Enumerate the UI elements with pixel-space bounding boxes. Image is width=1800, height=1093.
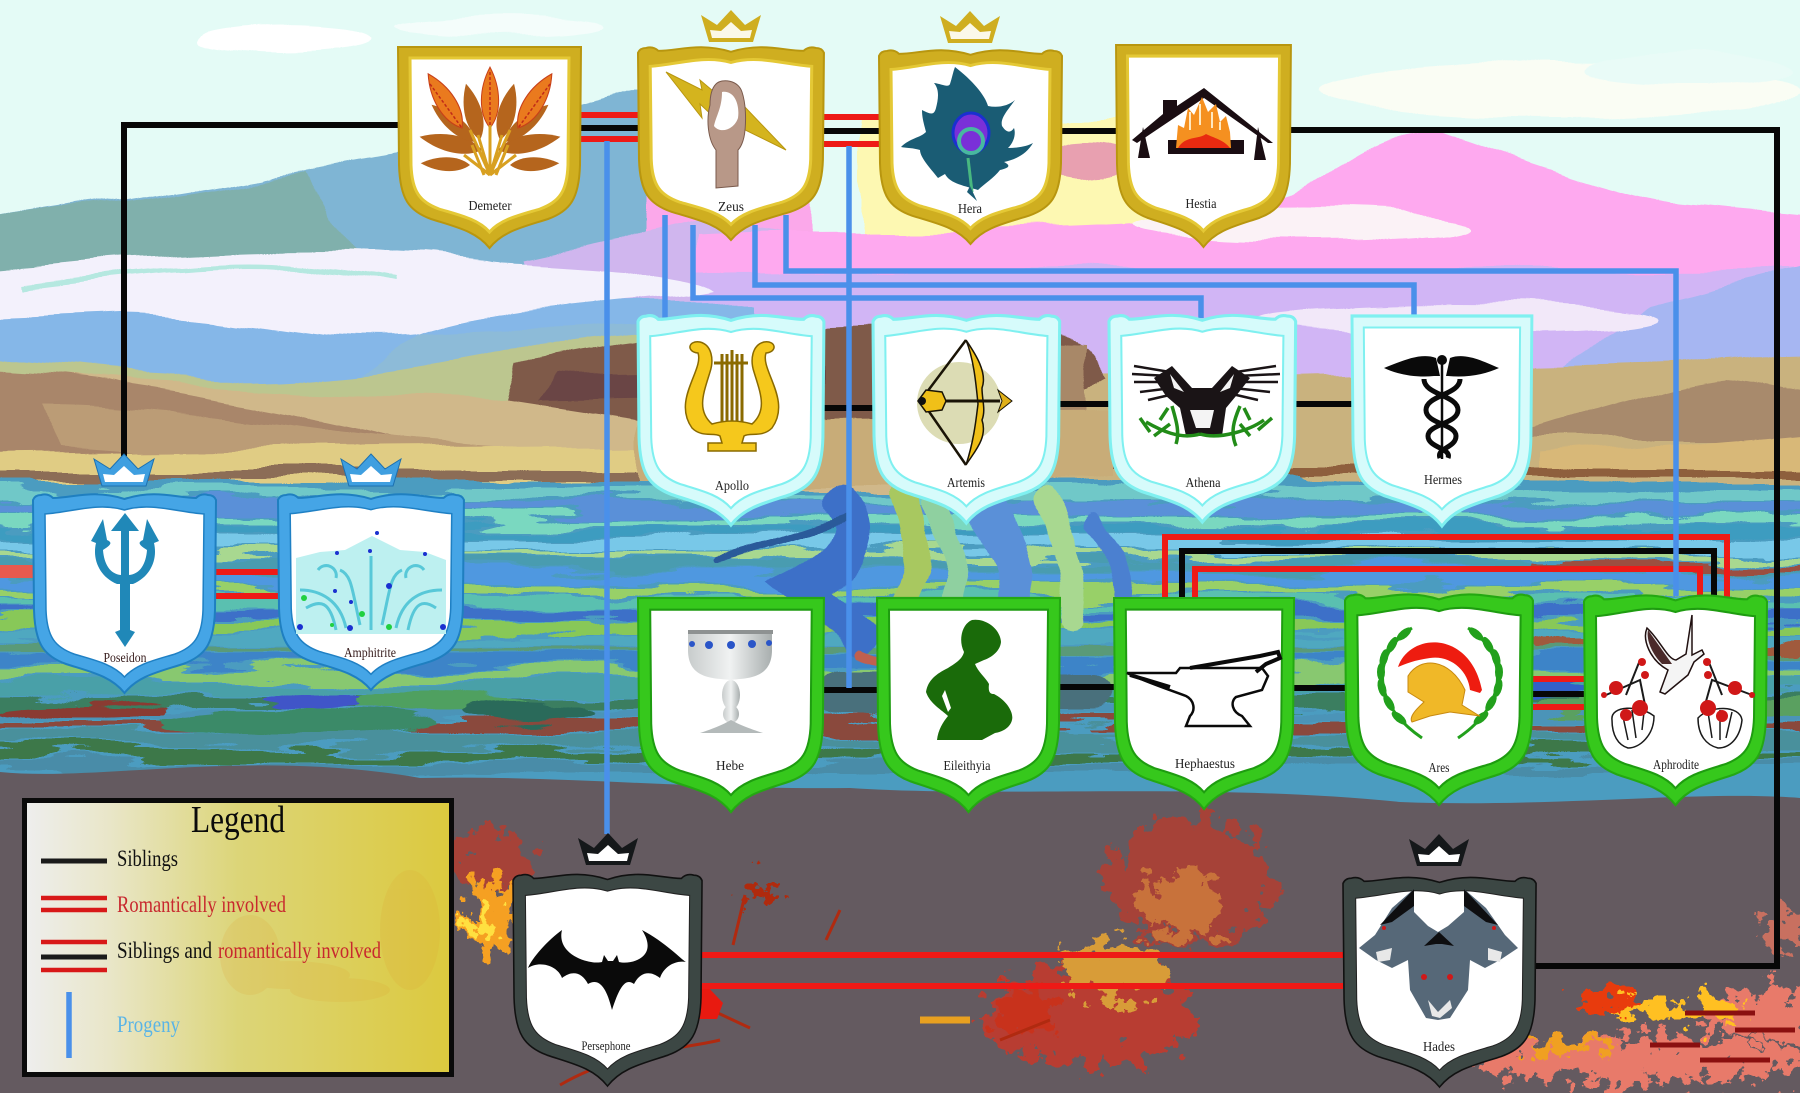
name: Hades: Hades — [1423, 1040, 1455, 1055]
name: Hebe: Hebe — [716, 759, 744, 774]
sky colours behind top row — [860, 120, 1160, 250]
shield: Demeter — [398, 47, 581, 248]
icon: peacock feather — [901, 67, 1033, 201]
shield: Aphrodite — [1584, 595, 1767, 805]
crown — [701, 10, 761, 42]
shield: Hermes — [1352, 316, 1532, 526]
shield: Amphitrite — [278, 454, 464, 690]
shield: Hestia — [1116, 45, 1291, 247]
pink mountain — [700, 132, 1800, 345]
shield: Poseidon — [33, 454, 216, 693]
legend: romantically involved — [41, 892, 286, 917]
shield: Ares — [1345, 594, 1533, 805]
name: Persephone: Persephone — [582, 1038, 631, 1053]
central sea swirl — [720, 495, 1126, 690]
shield: Artemis — [873, 315, 1060, 523]
icon: silver chalice — [688, 630, 773, 733]
icon: hearth house — [1132, 88, 1273, 160]
crown — [94, 454, 154, 486]
legend: progeny: Progeny — [117, 1012, 180, 1037]
name: Hestia: Hestia — [1186, 197, 1217, 212]
shield: Hephaestus — [1114, 598, 1294, 809]
icon: caduceus — [1384, 355, 1499, 459]
legend: siblings and romantically involved: Siblings and — [117, 938, 212, 963]
shield: Hades — [1343, 834, 1536, 1087]
icon: trident — [91, 513, 159, 647]
connector lines: romantically involved (red) — [216, 115, 1727, 986]
icon: golden lyre — [685, 342, 779, 451]
legend: siblings and romantically involved — [41, 938, 381, 970]
icon: dove, roses and shells — [1601, 615, 1755, 748]
connector lines: progeny (blue) — [607, 141, 1676, 834]
land bands — [0, 328, 820, 500]
shield: Athena — [1109, 315, 1296, 522]
name: Zeus: Zeus — [718, 200, 744, 215]
left mountain — [0, 88, 780, 300]
legend: siblings — [41, 846, 178, 871]
icon: owl and olive branch — [1132, 366, 1280, 446]
crown — [578, 833, 638, 865]
name: Ares: Ares — [1428, 761, 1450, 776]
name: Apollo: Apollo — [715, 479, 749, 494]
shield: Hebe — [638, 598, 824, 812]
shield: Apollo — [638, 315, 824, 525]
icon: ocean waves — [296, 531, 446, 634]
name: Hermes: Hermes — [1424, 473, 1462, 488]
name: Eileithyia: Eileithyia — [944, 759, 991, 774]
name: Hephaestus: Hephaestus — [1175, 757, 1235, 772]
icon: wheat sheaf — [418, 67, 562, 175]
left cloud and blue field — [0, 300, 760, 420]
shield: Hera — [879, 11, 1062, 244]
legend: progeny — [69, 992, 180, 1058]
icon: helmet and laurel — [1376, 625, 1504, 738]
legend: siblings and romantically involved: romantically involved — [218, 938, 381, 963]
icon: moon, bow and arrow — [917, 340, 1012, 465]
name: Aphrodite: Aphrodite — [1653, 758, 1699, 773]
icon: anvil and hammer — [1127, 652, 1280, 726]
icon: fist with lightning bolt — [666, 72, 786, 188]
legend: romantically involved: Romantically involved — [117, 892, 286, 917]
icon: pregnant silhouette — [926, 620, 1012, 740]
left edge red strip — [0, 565, 33, 578]
icon: bat — [528, 930, 686, 1010]
name: Hera: Hera — [958, 202, 983, 217]
shield: Zeus — [638, 10, 824, 240]
central brown mesa — [510, 325, 1110, 440]
legend title: Legend — [191, 799, 285, 841]
name: Poseidon: Poseidon — [104, 651, 146, 666]
name: Athena: Athena — [1186, 476, 1221, 491]
sea — [0, 482, 1800, 832]
crown — [1409, 834, 1469, 866]
legend panel — [24, 799, 452, 1074]
lava ground — [0, 765, 1800, 1093]
shield: Persephone — [513, 833, 702, 1086]
connector lines: siblings (black) — [124, 125, 1777, 966]
crown — [940, 11, 1000, 43]
shield: Eileithyia — [877, 598, 1060, 812]
legend: siblings: Siblings — [117, 846, 178, 871]
name: Demeter: Demeter — [468, 199, 512, 214]
name: Artemis: Artemis — [947, 476, 985, 491]
crown — [341, 454, 401, 486]
icon: three-headed wolf — [1359, 889, 1518, 1020]
name: Amphitrite: Amphitrite — [344, 646, 396, 661]
